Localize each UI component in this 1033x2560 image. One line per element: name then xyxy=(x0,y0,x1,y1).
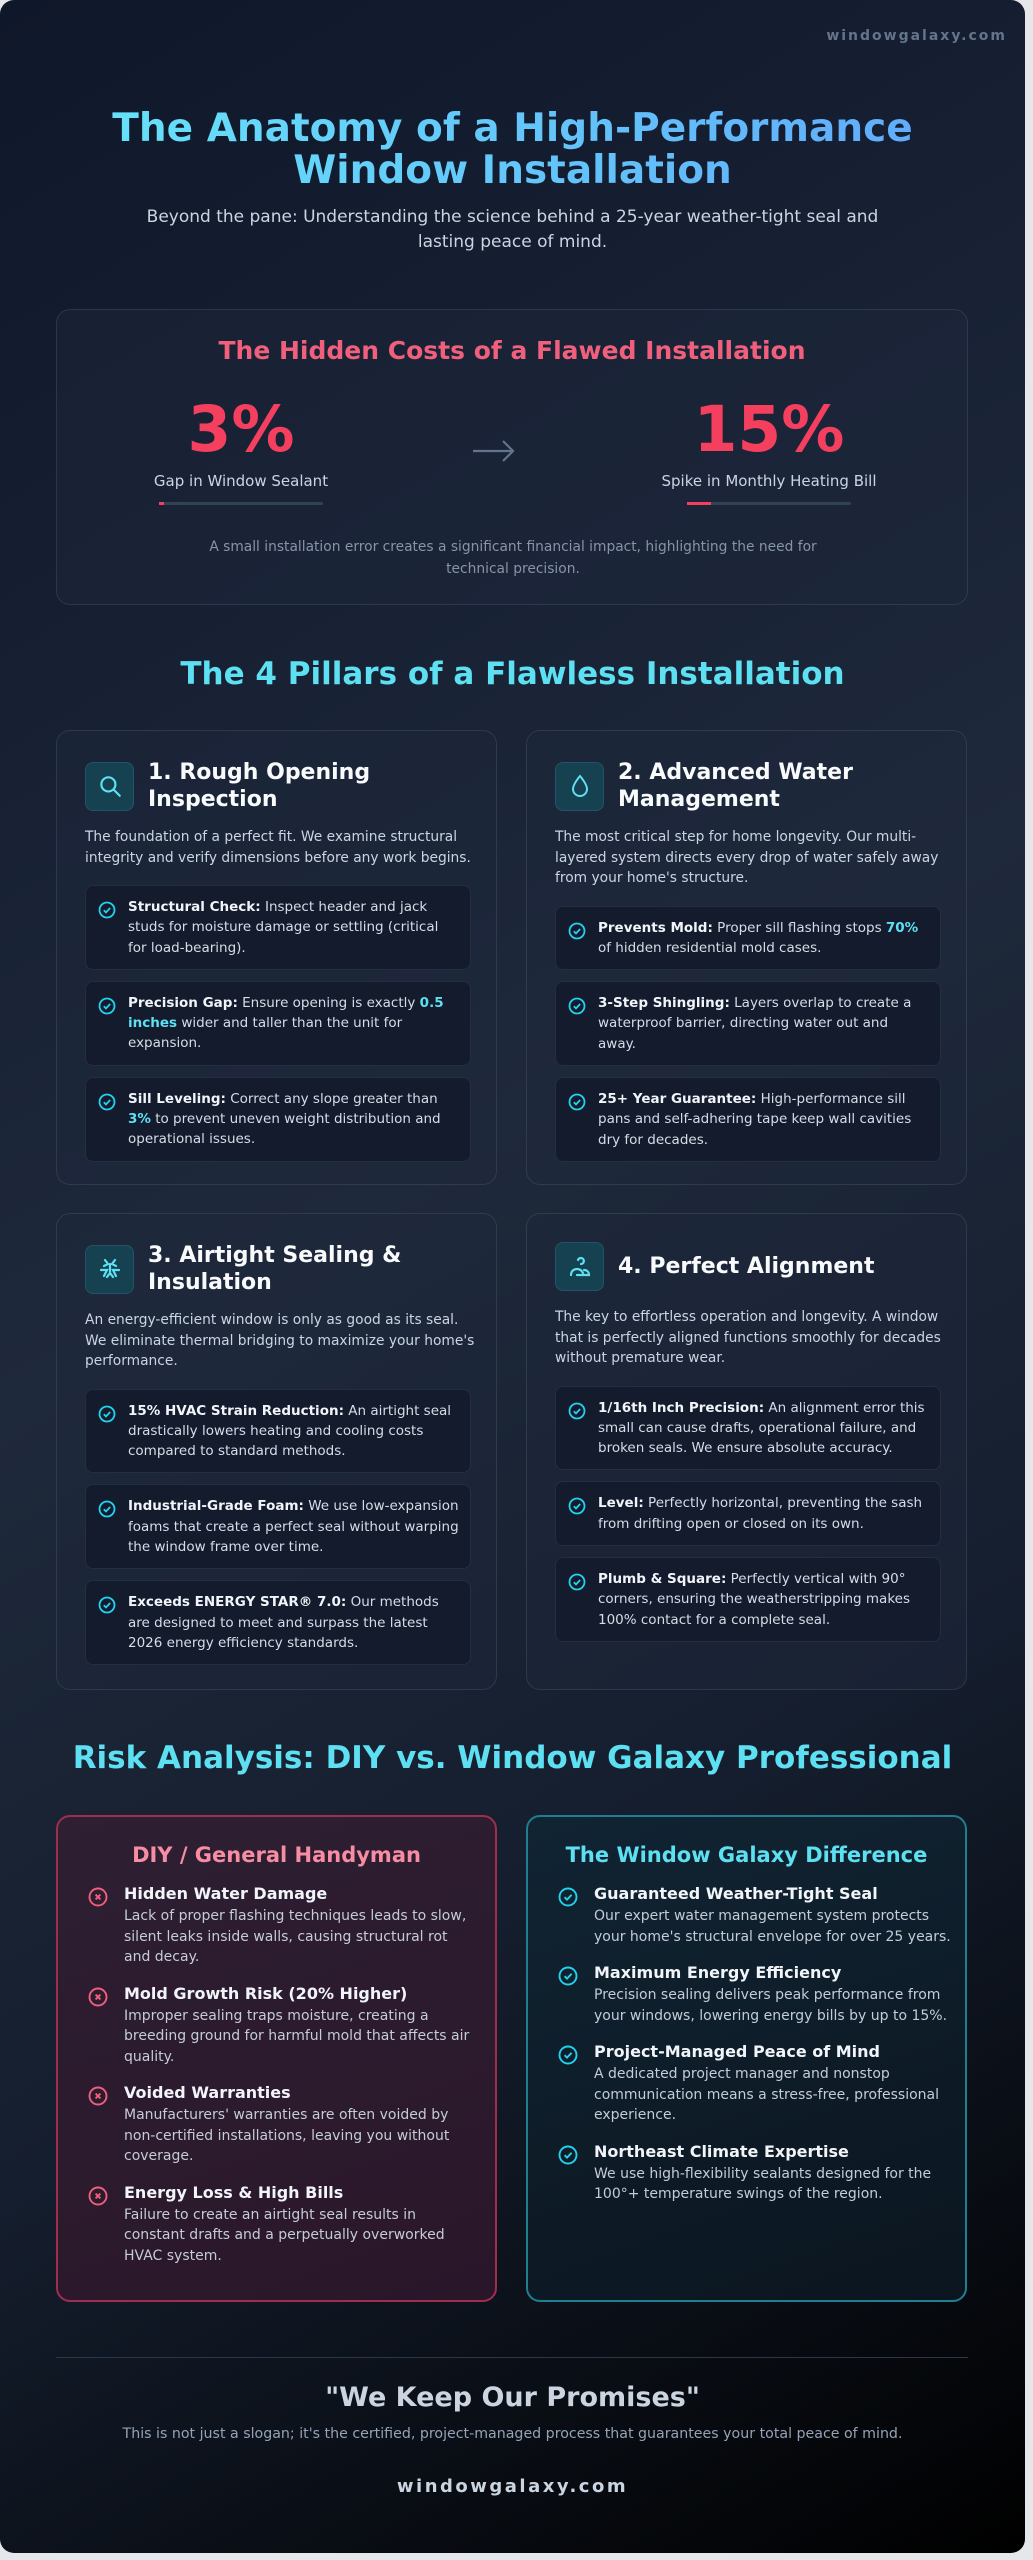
item: sill leveling: Sill Leveling: Correct any slope greater than 3% to prevent uneven weight distribution and operational issues. xyxy=(128,1091,441,1147)
item: hvac xyxy=(85,1388,471,1473)
benefit: seal: Guaranteed Weather-Tight Seal xyxy=(594,1884,878,1903)
item: structural check: Structural Check: Inspect header and jack studs for moisture damage or settling (critical for load-bearing). xyxy=(128,899,438,956)
benefit: project managed xyxy=(558,2042,939,2123)
item: foam xyxy=(85,1484,471,1569)
item: precision gap: Precision Gap: Ensure opening is exactly 0.5 inches wider and taller than the unit for expansion. xyxy=(128,995,444,1051)
panel: pillar 2 xyxy=(526,730,967,1185)
benefit: energy xyxy=(558,1963,947,2024)
item: energy star: Exceeds ENERGY STAR® 7.0: Our methods are designed to meet and surpass the latest 2026 energy efficiency standards. xyxy=(128,1594,439,1651)
item: level: Level: Perfectly horizontal, preventing the sash from drifting open or closed on its own. xyxy=(598,1495,922,1532)
pillar 2 description: The most critical step for home longevity. Our multi-layered system directs every drop of water safely away from your home's structure. xyxy=(555,829,938,886)
item: 3-step shingling xyxy=(555,981,941,1066)
pillar 1 header: 1. Rough Opening Inspection xyxy=(148,760,370,812)
top domain label: windowgalaxy.com xyxy=(826,28,1007,44)
benefit: seal: Our expert water management system protects your home's structural envelope for over 25 years. xyxy=(594,1908,951,1944)
panel: Window Galaxy difference xyxy=(526,1815,967,2302)
pillar 4 header xyxy=(555,1242,874,1291)
panel: pillar 4 xyxy=(526,1213,967,1690)
pillars heading: The 4 Pillars of a Flawless Installation xyxy=(180,656,845,692)
item: prevents mold: Prevents Mold: Proper sill flashing stops 70% of hidden residential mold cases. xyxy=(598,920,918,956)
pillar 4 header: 4. Perfect Alignment xyxy=(618,1254,874,1279)
stat: 3%: 3% xyxy=(188,393,294,466)
stat: 3% xyxy=(154,393,328,505)
risk: mold: Improper sealing traps moisture, creating a breeding ground for harmful mold that affects air quality. xyxy=(124,2008,469,2064)
footer domain: windowgalaxy.com xyxy=(397,2476,628,2497)
benefit: climate: Northeast Climate Expertise xyxy=(594,2142,849,2160)
risk: warranties: Manufacturers' warranties are often voided by non-certified installations, leaving you without coverage. xyxy=(124,2107,449,2164)
risk: mold xyxy=(88,1984,470,2064)
item: hvac: 15% HVAC Strain Reduction: An airtight seal drastically lowers heating and cooling costs compared to standard methods. xyxy=(128,1402,451,1459)
item: guarantee xyxy=(555,1077,941,1162)
item: foam: Industrial-Grade Foam: We use low-expansion foams that create a perfect seal without warping the window frame over time. xyxy=(128,1498,459,1555)
stat: 15%: Spike in Monthly Heating Bill xyxy=(662,472,876,490)
pillar 3 description: An energy-efficient window is only as good as its seal. We eliminate thermal bridging to maximize your home's performance. xyxy=(85,1312,474,1369)
item: energy star xyxy=(85,1580,471,1665)
panel: hidden costs xyxy=(56,309,968,605)
title: The Anatomy of a High-Performance xyxy=(112,106,913,151)
risk: water damage: Hidden Water Damage xyxy=(124,1884,327,1903)
risk: energy loss xyxy=(88,2182,445,2264)
risk: mold: Mold Growth Risk (20% Higher) xyxy=(124,1984,407,2002)
benefit: seal xyxy=(558,1884,951,1944)
footer quote: "We Keep Our Promises" xyxy=(325,2382,700,2413)
risk: energy loss: Energy Loss & High Bills xyxy=(124,2182,343,2202)
risk: water damage: Lack of proper flashing techniques leads to slow, silent leaks inside walls, causing structural rot and decay. xyxy=(124,1908,466,1965)
benefit: project managed: A dedicated project manager and nonstop communication means a stress-free, professional experience. xyxy=(594,2066,939,2123)
arrow xyxy=(473,440,514,462)
item: plumb xyxy=(555,1557,941,1642)
item: level xyxy=(555,1481,941,1546)
item: guarantee: 25+ Year Guarantee: High-performance sill pans and self-adhering tape keep wall cavities dry for decades. xyxy=(598,1091,911,1148)
stat: 3%: Gap in Window Sealant xyxy=(154,472,328,490)
benefit: climate: We use high-flexibility sealants designed for the 100°+ temperature swings of the region. xyxy=(594,2166,931,2202)
difference heading: The Window Galaxy Difference xyxy=(566,1843,927,1867)
item: precision gap xyxy=(85,981,471,1066)
panel: DIY risks xyxy=(56,1815,497,2302)
footer subtext: This is not just a slogan; it's the certified, project-managed process that guarantees your total peace of mind. xyxy=(123,2426,902,2442)
item: 3-step shingling: 3-Step Shingling: Layers overlap to create a waterproof barrier, directing water out and away. xyxy=(598,995,911,1052)
stat: 15%: 15% xyxy=(694,393,844,466)
benefit: project managed: Project-Managed Peace of Mind xyxy=(594,2042,880,2061)
item: precision: 1/16th Inch Precision: An alignment error this small can cause drafts, operational failure, and broken seals. We ensure absolute accuracy. xyxy=(598,1400,925,1456)
risk: warranties: Voided Warranties xyxy=(124,2083,291,2102)
item: precision xyxy=(555,1386,941,1470)
risk: warranties xyxy=(88,2083,450,2164)
item: structural check xyxy=(85,885,471,970)
pillar 2 header: 2. Advanced Water Management xyxy=(618,760,853,812)
note text: A small installation error creates a significant financial impact, highlighting the need for technical precision. xyxy=(209,539,817,577)
risk heading: Risk Analysis: DIY vs. Window Galaxy Professional xyxy=(73,1740,952,1776)
subtitle: Beyond the pane: Understanding the science behind a 25-year weather-tight seal and lasting peace of mind. xyxy=(147,207,878,252)
hidden costs heading: The Hidden Costs of a Flawed Installation xyxy=(218,336,806,365)
item: prevents mold xyxy=(555,906,941,970)
benefit: climate xyxy=(558,2142,931,2202)
pillar 1 description: The foundation of a perfect fit. We examine structural integrity and verify dimensions before any work begins. xyxy=(85,829,471,866)
panel: pillar 3 xyxy=(56,1213,497,1690)
panel: pillar 1 xyxy=(56,730,497,1185)
risk: water damage xyxy=(88,1884,466,1965)
stat: 15% xyxy=(662,393,876,505)
benefit: energy: Maximum Energy Efficiency xyxy=(594,1963,841,1982)
item: sill leveling xyxy=(85,1077,471,1162)
pillar 4 description: The key to effortless operation and longevity. A window that is perfectly aligned functions smoothly for decades without premature wear. xyxy=(555,1309,941,1366)
benefit: energy: Precision sealing delivers peak performance from your windows, lowering energy bills by up to 15%. xyxy=(594,1987,947,2024)
title: Window Installation xyxy=(293,148,732,193)
DIY heading: DIY / General Handyman xyxy=(132,1843,421,1867)
item: plumb: Plumb & Square: Perfectly vertical with 90° corners, ensuring the weatherstripping makes 100% contact for a complete seal. xyxy=(598,1571,910,1628)
risk: energy loss: Failure to create an airtight seal results in constant drafts and a perpetually overworked HVAC system. xyxy=(124,2206,445,2264)
title xyxy=(0,108,1025,192)
pillar 3 header: 3. Airtight Sealing & Insulation xyxy=(148,1243,401,1295)
